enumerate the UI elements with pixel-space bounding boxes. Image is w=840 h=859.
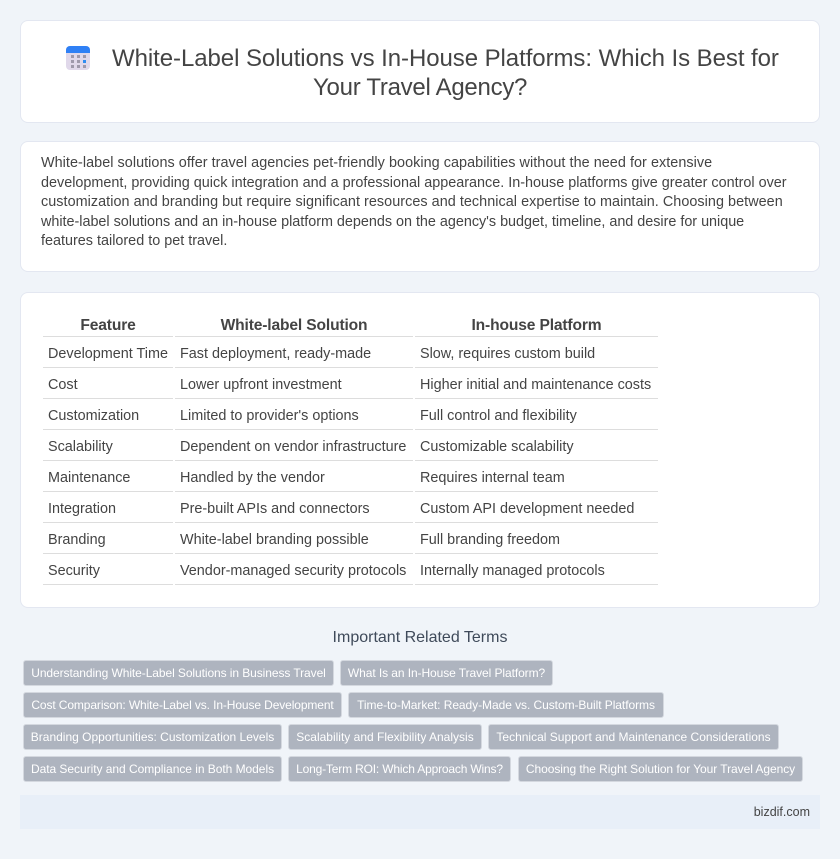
related terms tags: Long-Term ROI: Which Approach Wins? [296,762,503,776]
comparison table: White-label Solution [221,317,367,334]
intro paragraph: white-label solutions and an in-house platform depends on the agency's budget, timeline, and desire for unique [41,214,744,230]
panel: introduction [20,141,820,272]
comparison table: Higher initial and maintenance costs [420,377,651,393]
intro paragraph: development, providing quick integration and a professional appearance. In-house platforms give greater control over [41,174,787,190]
related terms tags: Data Security and Compliance in Both Models [31,762,274,776]
title [112,45,779,101]
comparison table: Security [48,563,100,579]
comparison table: Handled by the vendor [180,470,325,486]
comparison table: Vendor-managed security protocols [180,563,406,579]
related terms heading: Important Related Terms [333,629,507,646]
footer source text: bizdif.com [754,805,810,819]
related terms tags: Time-to-Market: Ready-Made vs. Custom-Built Platforms [357,698,655,712]
comparison table: In-house Platform [471,317,602,334]
title: Your Travel Agency? [313,74,527,101]
related terms tags: Technical Support and Maintenance Considerations [496,730,771,744]
comparison table: Development Time [48,346,168,362]
comparison table: Dependent on vendor infrastructure [180,439,406,455]
comparison table: Customizable scalability [420,439,574,455]
comparison table: Integration [48,501,116,517]
comparison table: Customization [48,408,139,424]
comparison table: Cost [48,377,78,393]
comparison table: Branding [48,532,106,548]
comparison table: Pre-built APIs and connectors [180,501,370,517]
related terms tags: Choosing the Right Solution for Your Travel Agency [526,762,795,776]
intro paragraph: White-label solutions offer travel agencies pet-friendly booking capabilities without the need for extensive [41,155,712,171]
intro paragraph: features tailored to pet travel. [41,233,227,249]
comparison table: Maintenance [48,470,130,486]
comparison table: Full control and flexibility [420,408,577,424]
comparison table: Requires internal team [420,470,565,486]
comparison table: Full branding freedom [420,532,560,548]
comparison table: White-label branding possible [180,532,369,548]
comparison table: Fast deployment, ready-made [180,346,371,362]
comparison table: Internally managed protocols [420,563,605,579]
related terms tags: Scalability and Flexibility Analysis [296,730,474,744]
related terms tags: Cost Comparison: White-Label vs. In-House Development [31,698,334,712]
header panel [20,20,820,123]
comparison table [43,317,658,585]
intro paragraph: customization and branding but require significant resources and technical expertise to maintain. Choosing between [41,194,783,210]
icon: calendar [66,46,90,70]
comparison table: Limited to provider's options [180,408,359,424]
title: White-Label Solutions vs In-House Platforms: Which Is Best for [112,45,779,72]
footer bar [20,795,820,829]
comparison table: Lower upfront investment [180,377,342,393]
table header: feature: Feature [80,317,136,334]
intro paragraph [41,155,787,249]
panel: comparison table [20,292,820,608]
related terms tags: What Is an In-House Travel Platform? [348,666,545,680]
comparison table: Scalability [48,439,113,455]
related terms tags [23,660,803,782]
related terms tags: Understanding White-Label Solutions in Business Travel [31,666,326,680]
comparison table: Slow, requires custom build [420,346,595,362]
comparison table: Custom API development needed [420,501,634,517]
related terms tags: Branding Opportunities: Customization Levels [31,730,274,744]
